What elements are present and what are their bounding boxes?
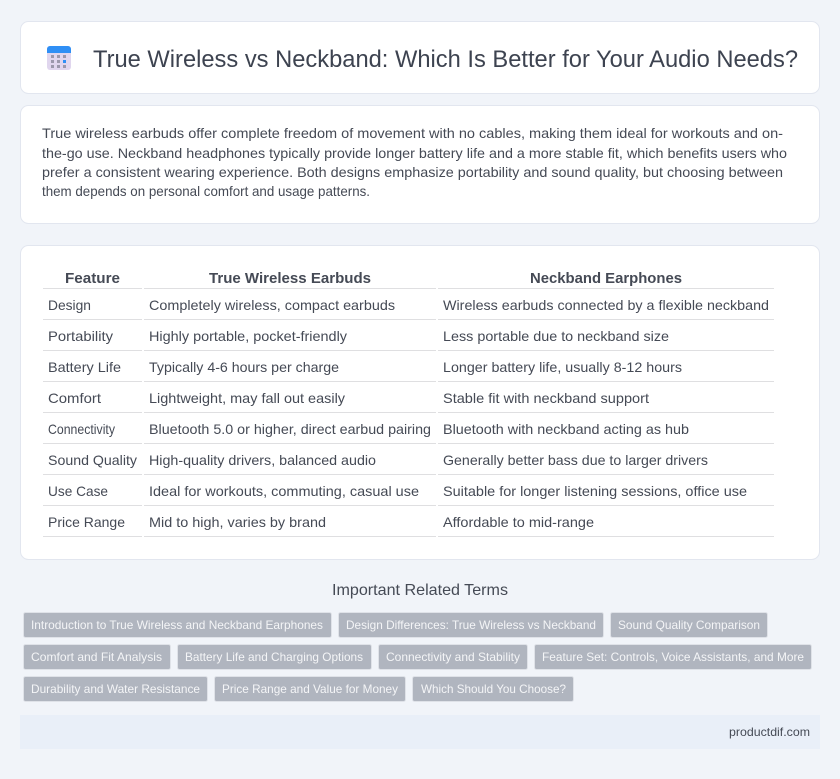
heading: important related terms: Important Related Terms	[332, 582, 508, 599]
table row: Portability: Highly portable, pocket-friendly	[149, 328, 347, 344]
table header row	[65, 271, 682, 287]
table row: Use Case: Suitable for longer listening sessions, office use	[443, 483, 747, 499]
table row: Sound Quality	[48, 452, 708, 468]
text block: introduction paragraph: True wireless earbuds offer complete freedom of movement with no cables, making them ideal for workouts and on-	[42, 125, 783, 141]
footer bar	[20, 715, 820, 749]
title: True Wireless vs Neckband: Which Is Better for Your Audio Needs?	[93, 46, 798, 73]
table row: Comfort: Stable fit with neckband support	[443, 390, 649, 406]
table row: Design: Design	[48, 297, 91, 313]
related term tags: Connectivity and Stability	[386, 650, 520, 664]
table row: Battery Life: Battery Life	[48, 359, 121, 375]
text block: introduction paragraph: the-go use. Neckband headphones typically provide longer battery life and a more stable fit, which benefits users who	[42, 145, 787, 161]
panel: introduction	[20, 106, 820, 224]
table row: Portability	[48, 328, 669, 344]
table row: Design: Completely wireless, compact earbuds	[149, 297, 395, 313]
table row: Use Case: Use Case	[48, 483, 108, 499]
table row: Battery Life	[48, 359, 682, 375]
related term tags: Durability and Water Resistance	[31, 682, 200, 696]
table row: Design	[48, 297, 769, 313]
table row: Connectivity: Connectivity	[48, 421, 115, 437]
table row: Price Range: Price Range	[48, 514, 125, 530]
table row: Connectivity	[48, 421, 689, 437]
table row: Battery Life: Typically 4-6 hours per charge	[149, 359, 339, 375]
related term tags: Battery Life and Charging Options	[185, 650, 363, 664]
text block: introduction paragraph	[42, 125, 787, 199]
table row: Portability: Less portable due to neckband size	[443, 328, 669, 344]
related term tags: Introduction to True Wireless and Neckband Earphones	[31, 618, 323, 632]
related term tags: Price Range and Value for Money	[222, 682, 398, 696]
table row: Price Range: Affordable to mid-range	[443, 514, 594, 530]
table row: Sound Quality: High-quality drivers, balanced audio	[149, 452, 376, 468]
related term tags: Comfort and Fit Analysis	[31, 650, 162, 664]
related term tags: Feature Set: Controls, Voice Assistants, and More	[542, 650, 804, 664]
table row: Price Range	[48, 514, 594, 530]
related term tags: Design Differences: True Wireless vs Neckband	[346, 618, 596, 632]
table row: Connectivity: Bluetooth 5.0 or higher, direct earbud pairing	[149, 421, 431, 437]
table row: Design: Wireless earbuds connected by a flexible neckband	[443, 297, 769, 313]
table row: Use Case: Ideal for workouts, commuting, casual use	[149, 483, 419, 499]
table header row: True Wireless Earbuds	[209, 271, 371, 287]
table header row: Neckband Earphones	[530, 271, 682, 287]
related term tags: Which Should You Choose?	[421, 682, 566, 696]
text block: introduction paragraph: prefer a consistent wearing experience. Both designs emphasize portability and sound quality, but choosing between	[42, 164, 783, 180]
table row: Comfort: Comfort	[48, 390, 101, 406]
panel: title header	[20, 22, 820, 94]
related term tags	[24, 612, 812, 702]
table row: Portability: Portability	[48, 328, 113, 344]
table row: Comfort	[48, 390, 649, 406]
footer source text: productdif.com	[729, 725, 810, 739]
table header row: Feature	[65, 271, 120, 287]
table row: Connectivity: Bluetooth with neckband acting as hub	[443, 421, 689, 437]
table row: Sound Quality: Generally better bass due to larger drivers	[443, 452, 708, 468]
table row: Sound Quality: Sound Quality	[48, 452, 137, 468]
icon: calendar	[47, 46, 71, 70]
table row: Battery Life: Longer battery life, usually 8-12 hours	[443, 359, 682, 375]
table row: Price Range: Mid to high, varies by brand	[149, 514, 326, 530]
table row: Use Case	[48, 483, 747, 499]
panel: comparison table	[20, 246, 820, 560]
related term tags: Sound Quality Comparison	[618, 618, 760, 632]
text block: introduction paragraph: them depends on personal comfort and usage patterns.	[42, 183, 370, 199]
table row: Comfort: Lightweight, may fall out easily	[149, 390, 345, 406]
